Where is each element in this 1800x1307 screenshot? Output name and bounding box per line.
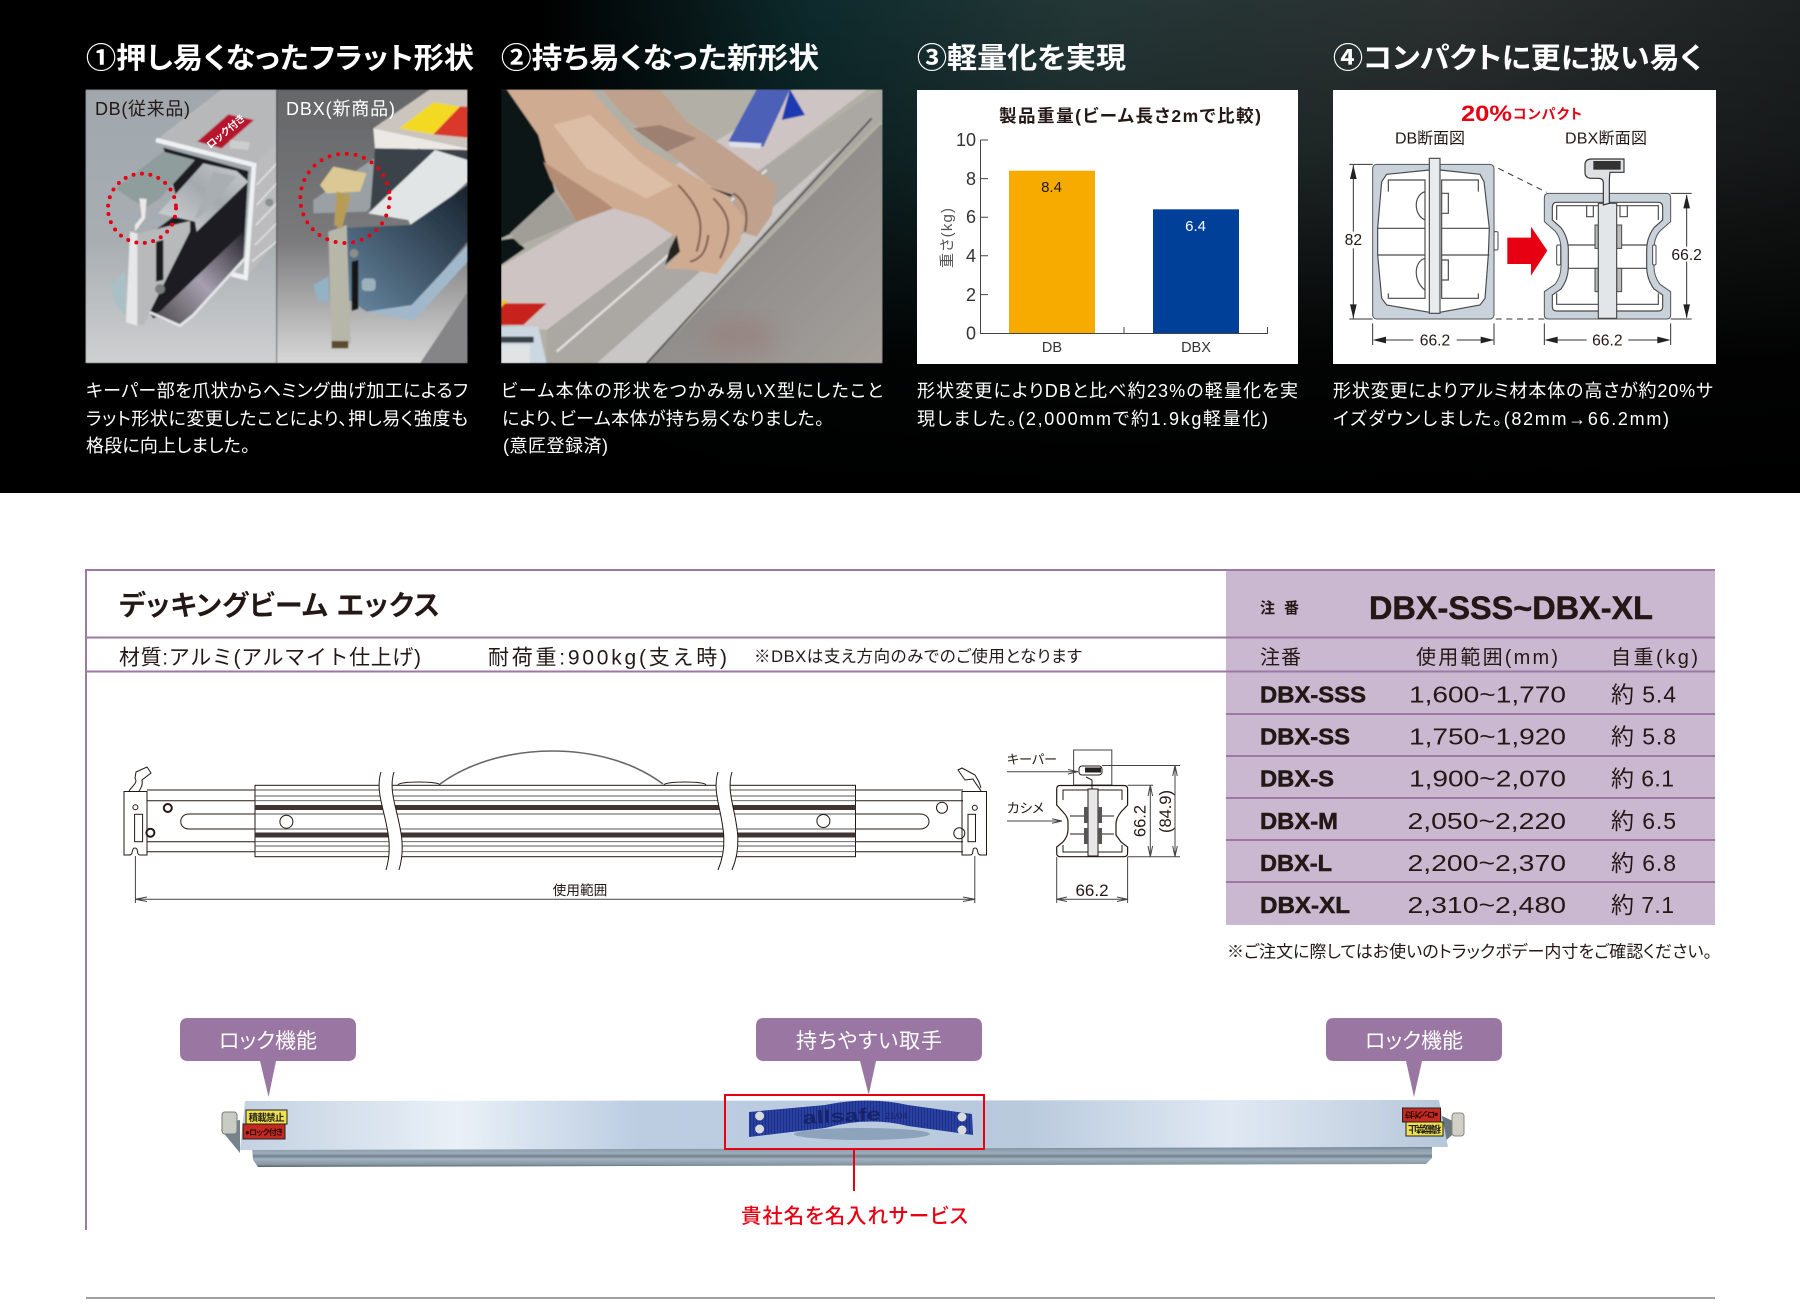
- end plate right: [962, 792, 986, 855]
- description 1: ラット形状に変更したことにより、押し易く強度も: [86, 409, 468, 429]
- y axis title: 重さ(kg): [939, 208, 956, 268]
- usage range dimension: 使用範囲: [553, 882, 607, 898]
- table title: DBX-SSS~DBX-XL: [1369, 590, 1653, 626]
- dimension: height 66.2: 66.2: [1132, 805, 1150, 837]
- description 2: により、ビーム本体が持ち易くなりました。: [502, 409, 824, 429]
- inner rails: [147, 790, 963, 852]
- row DBX-M: [1260, 808, 1676, 834]
- cross-section comparison card: [1333, 90, 1716, 364]
- bottom rule: [86, 1297, 1715, 1299]
- right latch: [958, 768, 981, 791]
- row DBX-M: DBX-M: [1260, 808, 1338, 834]
- panel: weight reduction feature: [917, 42, 1298, 429]
- column headers: 自重(kg): [1611, 646, 1698, 669]
- usage note: ※DBXは支え方向のみでのご使用となります: [754, 647, 1082, 666]
- section inner detail: [1063, 766, 1122, 856]
- row DBX-SS: [1260, 724, 1676, 750]
- y axis tick labels: 10: [956, 130, 976, 150]
- y axis tick labels: [956, 130, 976, 344]
- row DBX-S: 約 6.1: [1611, 766, 1674, 792]
- row DBX-SS: 約 5.8: [1611, 724, 1676, 750]
- row DBX-SSS: DBX-SSS: [1260, 682, 1366, 708]
- 20% compact label: コンパクト: [1513, 106, 1582, 122]
- top face: [240, 1100, 1448, 1150]
- 20% compact label: [1461, 101, 1582, 126]
- row DBX-S: DBX-S: [1260, 766, 1334, 792]
- outer sleeve: [255, 785, 856, 857]
- usage range dimension: [135, 856, 975, 903]
- row DBX-L: 約 6.8: [1611, 850, 1676, 876]
- callout: lock left: ロック機能: [219, 1030, 317, 1053]
- column headers: [1260, 646, 1698, 669]
- dimension: width 66.2: 66.2: [1075, 881, 1109, 900]
- callout: keeper: [1007, 752, 1078, 774]
- handle arc and mounts: [398, 751, 706, 785]
- row DBX-XL: [1260, 892, 1674, 918]
- load capacity: 耐荷重:900kg(支え時): [488, 646, 727, 670]
- bar: DBX 6.4: [1153, 209, 1239, 333]
- dimension: width 66.2: [1057, 857, 1128, 903]
- DB cross-section: [1373, 158, 1498, 319]
- table footnote: ※ご注文に際してはお使いのトラックボデー内寸をご確認ください。: [1227, 942, 1712, 962]
- red dotted circle: DB keeper: [108, 174, 176, 243]
- row DBX-SS: 1,750~1,920: [1409, 724, 1566, 750]
- left latch: [129, 767, 151, 791]
- left warning label: 積載禁止: [248, 1112, 285, 1124]
- row DBX-L: [1260, 850, 1676, 876]
- description 2: (意匠登録済): [503, 436, 608, 456]
- description 3: [917, 381, 1298, 429]
- column headers: 注番: [1260, 646, 1301, 669]
- row DBX-XL: 約 7.1: [1611, 892, 1674, 918]
- table: order numbers: [1260, 590, 1698, 918]
- y axis tick labels: 8: [966, 169, 976, 189]
- bar: DB 8.4: [1009, 171, 1095, 333]
- right warning label: [1402, 1108, 1443, 1136]
- dimension values: 66.2: [1420, 332, 1450, 349]
- dimension: overall height 84.9: (84.9): [1157, 790, 1175, 833]
- DBX cross-section: [1544, 159, 1671, 319]
- section outline: [1057, 786, 1128, 857]
- product photo: beam: [221, 1100, 1464, 1167]
- callout: easy grip handle: [756, 1018, 982, 1095]
- y axis tick labels: 0: [966, 324, 976, 344]
- description 2: [501, 381, 883, 456]
- row DBX-SS: DBX-SS: [1260, 724, 1350, 750]
- bar: DB 8.4: 8.4: [1041, 179, 1062, 196]
- dimension values: 66.2: [1592, 332, 1623, 349]
- callout: lock right: ロック機能: [1365, 1030, 1463, 1053]
- heading 4: ④コンパクトに更に扱い易く: [1333, 42, 1702, 75]
- row DBX-M: 2,050~2,220: [1408, 808, 1566, 834]
- y axis tick labels: 6: [966, 207, 976, 227]
- right warning label: ●ロック付き: [1404, 1110, 1438, 1120]
- dimension values: 82: [1345, 232, 1362, 249]
- row DBX-SSS: 1,600~1,770: [1409, 682, 1566, 708]
- dimension values: [1345, 232, 1702, 349]
- label: name printing service: 貴社名を名入れサービス: [741, 1205, 968, 1228]
- description 2: ビーム本体の形状をつかみ易いX型にしたこと: [501, 381, 883, 401]
- section title: DBX: DBX断面図: [1565, 130, 1647, 148]
- description 3: 形状変更によりDBと比べ約23%の軽量化を実: [917, 381, 1298, 401]
- description 1: [86, 381, 468, 456]
- end plate holes: [133, 802, 977, 842]
- end plate left: [124, 792, 147, 855]
- bar: DBX 6.4: 6.4: [1185, 218, 1206, 235]
- panel: flat shape feature: [85, 42, 474, 456]
- row DBX-L: DBX-L: [1260, 850, 1332, 876]
- right lock: [1440, 1113, 1464, 1146]
- row DBX-S: 1,900~2,070: [1409, 766, 1566, 792]
- photo: DB versus DBX keeper comparison: [85, 89, 468, 363]
- rail: [252, 1146, 1432, 1167]
- heading 2: ②持ち易くなった新形状: [501, 42, 819, 75]
- row DBX-XL: DBX-XL: [1260, 892, 1350, 918]
- row DBX-S: [1260, 766, 1674, 792]
- row DBX-SSS: [1260, 682, 1676, 708]
- x axis labels: DBX: [1181, 340, 1211, 356]
- dark feature band background: [0, 0, 1800, 493]
- photo label: DBX: DBX(新商品): [286, 99, 395, 119]
- panel: easy-to-hold shape feature: [501, 42, 883, 456]
- column headers: 使用範囲(mm): [1416, 646, 1558, 669]
- left lock: [221, 1112, 240, 1153]
- description 3: 現しました。(2,000mmで約1.9kg軽量化): [917, 409, 1268, 429]
- description 1: 格段に向上しました。: [86, 436, 250, 456]
- heading 3: ③軽量化を実現: [917, 42, 1126, 75]
- left warning label: [243, 1110, 287, 1139]
- photo label: DB: DB(従来品): [95, 99, 190, 119]
- callout: crimp: [1007, 801, 1062, 823]
- section title: DB: DB断面図: [1395, 130, 1465, 148]
- left warning label: ●ロック付き: [245, 1127, 283, 1137]
- spec table background: [1226, 570, 1715, 925]
- callout: easy grip handle: 持ちやすい取手: [796, 1030, 942, 1053]
- dimension: height 66.2: [1128, 785, 1180, 857]
- callout: lock left: [180, 1018, 356, 1097]
- bar chart card: [917, 90, 1298, 364]
- row DBX-XL: 2,310~2,480: [1408, 892, 1566, 918]
- dimension: overall height 84.9: [1102, 766, 1180, 857]
- x axis labels: [1042, 340, 1211, 356]
- photo: hands gripping beam: [501, 89, 883, 363]
- callout: keeper: キーパー: [1007, 752, 1057, 767]
- row DBX-M: 約 6.5: [1611, 808, 1676, 834]
- keeper clearance box: [1074, 750, 1112, 785]
- description 4: イズダウンしました。(82mm→66.2mm): [1333, 409, 1669, 429]
- product name: デッキングビーム エックス: [119, 589, 440, 621]
- chart axes: [980, 140, 1268, 334]
- photo: DB versus DBX keeper comparison: ロック付き: [204, 112, 247, 151]
- description 4: 形状変更によりアルミ材本体の高さが約20%サ: [1333, 381, 1713, 401]
- description 1: キーパー部を爪状からヘミング曲げ加工によるフ: [86, 381, 468, 401]
- 20% compact label: 20%: [1461, 101, 1512, 126]
- highlight box: handle: [725, 1095, 984, 1149]
- material: 材質:アルミ(アルマイト仕上げ): [119, 646, 421, 670]
- drawing: DB and DBX cross-sections: [1345, 158, 1702, 349]
- leader line: name printing: [853, 1149, 855, 1191]
- right warning label: 積載禁止: [1408, 1122, 1441, 1134]
- row DBX-L: 2,200~2,370: [1408, 850, 1566, 876]
- row DBX-SSS: 約 5.4: [1611, 682, 1676, 708]
- technical drawing: section view: [1007, 750, 1180, 903]
- heading 1: ①押し易くなったフラット形状: [86, 42, 474, 75]
- y axis tick labels: 4: [966, 246, 976, 266]
- technical drawing: side view: [124, 751, 986, 903]
- x axis labels: DB: [1042, 340, 1062, 356]
- callout: crimp: カシメ: [1007, 801, 1044, 816]
- red dotted circle: DBX keeper: [300, 154, 390, 243]
- red arrow DB to DBX: [1507, 227, 1547, 276]
- chart title: 製品重量(ビーム長さ2mで比較): [999, 106, 1261, 126]
- callout: lock right: [1326, 1018, 1502, 1097]
- dimension values: 66.2: [1671, 247, 1702, 264]
- panel: product specification: [86, 570, 1715, 1230]
- table title: 注 番: [1260, 599, 1299, 617]
- description 4: [1333, 381, 1713, 429]
- purple frame lines: [86, 570, 1715, 1230]
- dimension lines: [1349, 164, 1692, 345]
- break marks: [379, 772, 738, 870]
- y axis tick labels: 2: [966, 285, 976, 305]
- strap handle: [749, 1100, 973, 1140]
- panel: compact size feature: [1333, 42, 1716, 429]
- strap handle: 21/04: [885, 1111, 908, 1121]
- strap handle: allsafe: [802, 1104, 881, 1128]
